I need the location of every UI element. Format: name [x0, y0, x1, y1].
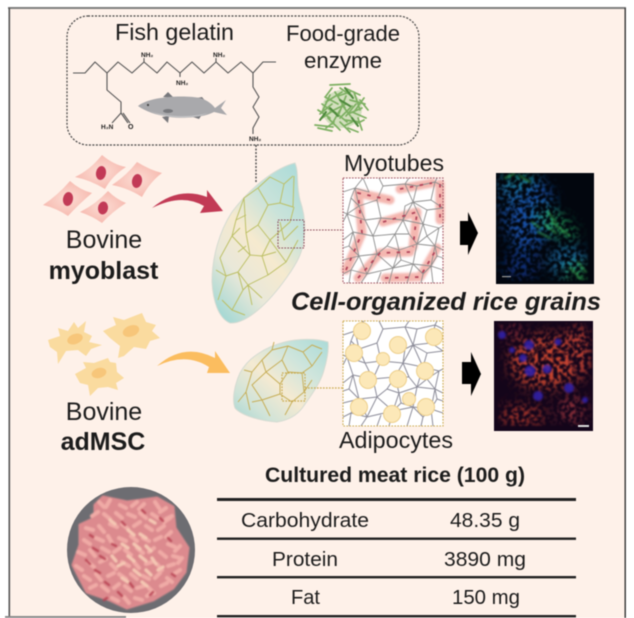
- row: carbohydrate: [241, 509, 520, 532]
- chemical structure: gelatin chain: [73, 52, 276, 143]
- arrow: to myotube micrograph: [460, 212, 478, 255]
- icon: bovine myoblast cells: [43, 155, 162, 223]
- row: protein: [272, 548, 526, 571]
- dotted connector: [255, 145, 257, 182]
- row: fat: Fat: [291, 586, 320, 609]
- row: protein: Protein: [272, 548, 338, 571]
- label: myotubes: Myotubes: [344, 150, 444, 176]
- heading: food-grade enzyme: [286, 21, 400, 73]
- heading: cell-organized rice grains: Cell-organized rice grains: [291, 288, 601, 316]
- chemical structure: gelatin chain: NH₂: [213, 52, 225, 59]
- arrow: to adipocyte micrograph: [462, 352, 481, 396]
- label: adipocytes: Adipocytes: [339, 427, 453, 453]
- row: protein: 3890 mg: [444, 548, 526, 571]
- photo: cultured meat rice on plate: [67, 487, 195, 613]
- panel: fish gelatin and enzyme: [67, 16, 419, 145]
- micrograph: adipocytes: [494, 321, 593, 431]
- row: carbohydrate: Carbohydrate: [241, 509, 369, 532]
- diagram: myotubes in mesh: [343, 178, 443, 283]
- micrograph: myotubes: [496, 173, 594, 284]
- chemical structure: gelatin chain: NH₂: [249, 136, 261, 143]
- row: fat: 150 mg: [452, 586, 520, 609]
- label: bovine adMSC: adMSC: [61, 428, 145, 456]
- chemical structure: gelatin chain: O: [128, 124, 134, 131]
- icon: small rice grain: [234, 339, 328, 422]
- icon: large rice grain: [212, 163, 305, 323]
- label: bovine myoblast: [49, 226, 159, 285]
- arrow: adMSC to grain: [157, 351, 230, 373]
- arrow: myoblast to grain: [152, 190, 223, 213]
- label: bovine adMSC: [61, 398, 145, 456]
- inset marker: myotube region: [278, 220, 343, 248]
- icon: enzyme structure: [315, 84, 368, 132]
- heading: food-grade enzyme: Food-grade: [286, 21, 400, 46]
- inset marker: adipocyte region: [282, 373, 343, 401]
- label: bovine myoblast: Bovine: [66, 226, 142, 254]
- chemical structure: gelatin chain: NH₂: [176, 80, 188, 87]
- label: bovine adMSC: Bovine: [66, 398, 142, 426]
- table title: Cultured meat rice (100 g): [265, 464, 525, 487]
- row: carbohydrate: 48.35 g: [450, 509, 520, 532]
- heading: fish gelatin: Fish gelatin: [115, 19, 234, 45]
- chemical structure: gelatin chain: NH₂: [141, 52, 153, 59]
- label: bovine myoblast: myoblast: [49, 257, 159, 285]
- table: cultured meat rice composition: [217, 464, 576, 617]
- chemical structure: gelatin chain: H₂N: [101, 124, 114, 131]
- heading: food-grade enzyme: enzyme: [304, 48, 382, 73]
- table rules: [217, 498, 576, 617]
- icon: bovine adMSC cells: [48, 313, 160, 396]
- row: fat: [291, 586, 520, 609]
- diagram: adipocytes in mesh: [343, 321, 443, 426]
- icon: fish: [138, 92, 227, 123]
